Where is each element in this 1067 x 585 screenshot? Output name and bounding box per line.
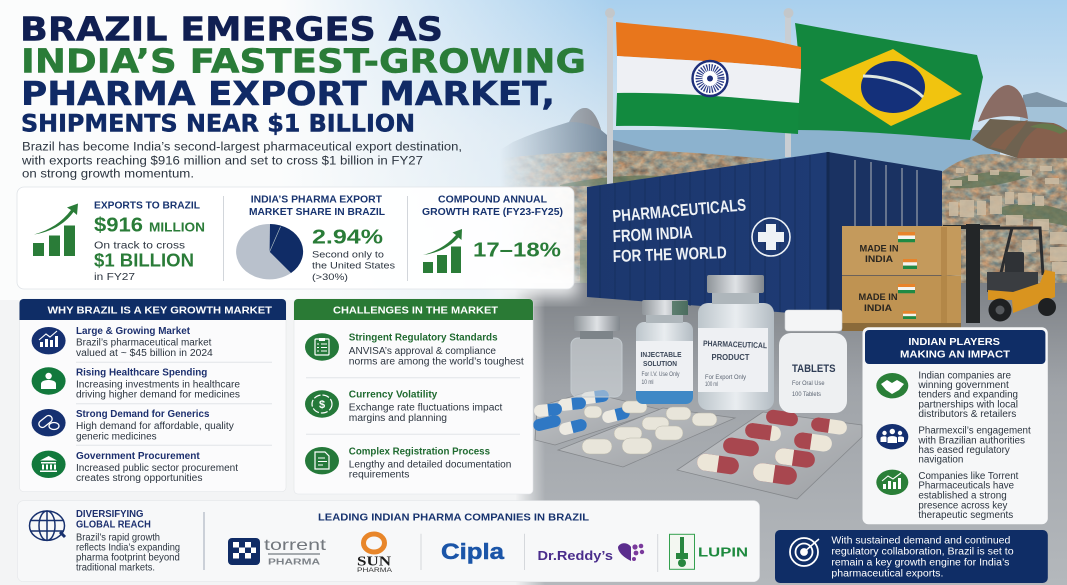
white tablets — [582, 401, 717, 454]
item: strong demand for generics: Strong Demand for Generics — [76, 408, 210, 420]
item: partnerships — [876, 370, 1018, 420]
Brazil flag — [784, 8, 983, 157]
item: large and growing market — [32, 325, 213, 359]
title — [20, 10, 586, 138]
cartons made in India: INDIA — [865, 254, 894, 264]
item: partnerships: Indian companies are — [918, 370, 1011, 381]
callout: outlook: regulatory collaboration, Brazil is set to — [831, 546, 1014, 557]
item: Pharmexcil engagement: Pharmexcil’s engagement — [918, 425, 1031, 436]
intro text: with exports reaching $916 million and set to cross $1 billion in FY27 — [21, 155, 423, 167]
intro text: on strong growth momentum. — [22, 169, 194, 181]
item: partnerships: distributors & retailers — [918, 409, 1016, 420]
item: Torrent presence: presence across key — [918, 500, 1007, 511]
item: rising healthcare spending: Increasing investments in healthcare — [76, 379, 240, 390]
item: rising healthcare spending: Rising Healthcare Spending — [76, 366, 207, 378]
item: currency volatility: Currency Volatility — [349, 389, 437, 401]
blue capsules — [532, 389, 631, 436]
item: currency volatility: margins and planning — [349, 413, 447, 424]
injectable solution vial: SOLUTION — [643, 359, 677, 368]
pharmaceutical product vial — [698, 275, 774, 410]
header: CHALLENGES IN THE MARKET — [333, 304, 499, 316]
pharmaceutical product vial: For Export Only — [705, 375, 746, 381]
item: government procurement — [32, 450, 238, 484]
icon: target — [790, 538, 819, 566]
pharmaceutical product vial: 100 ml — [705, 382, 718, 388]
icon: dollar cycle — [305, 390, 339, 418]
stat: market share: Second only to — [312, 249, 384, 260]
item: strong demand for generics: High demand for affordable, quality — [76, 421, 234, 432]
icon: chart — [876, 470, 908, 495]
small clear vial — [571, 316, 622, 397]
diversifying global reach — [30, 508, 180, 573]
item: strong demand for generics — [32, 408, 234, 442]
stat: exports to Brazil: $1 BILLION — [94, 251, 194, 271]
callout: outlook: remain a key growth engine for India’s — [831, 557, 1009, 568]
cartons made in India — [842, 226, 961, 331]
header: WHY BRAZIL IS A KEY GROWTH MARKET — [48, 304, 273, 316]
tablets bottle: For Oral Use — [792, 381, 825, 387]
logo: Lupin: LUPIN — [698, 545, 748, 560]
diversifying global reach: reflects India’s expanding — [76, 542, 180, 553]
flags of India and Brazil — [605, 8, 983, 187]
logo: Torrent Pharma — [228, 537, 327, 566]
logo: Sun Pharma — [357, 534, 392, 574]
stat: market share: 2.94% — [312, 226, 383, 248]
item: Torrent presence: established a strong — [918, 490, 1007, 501]
title: INDIA’S FASTEST-GROWING — [21, 42, 586, 81]
stat: compound annual growth rate: 17–18% — [473, 240, 561, 262]
item: complex registration process — [305, 445, 511, 481]
item: rising healthcare spending: driving higher demand for medicines — [76, 390, 240, 401]
stat: exports to Brazil: EXPORTS TO BRAZIL — [94, 200, 201, 212]
panel: why Brazil is a key growth market — [20, 299, 286, 492]
stat: market share: the United States — [312, 260, 395, 271]
item: government procurement: Government Procurement — [76, 450, 200, 462]
red capsules — [696, 409, 848, 486]
logo: Torrent Pharma: PHARMA — [268, 557, 320, 566]
panel: challenges in the market — [294, 299, 533, 494]
intro text: Brazil has become India’s second-largest pharmaceutical export destination, — [22, 142, 462, 154]
tablets bottle: 100 Tablets — [792, 392, 821, 398]
container lettering — [612, 195, 747, 266]
logo: Torrent Pharma: torrent — [264, 537, 327, 554]
stat: exports to Brazil: $916 — [94, 215, 143, 237]
item: government procurement: Increased public sector procurement — [76, 463, 238, 474]
item: complex registration process: Complex Registration Process — [349, 445, 490, 457]
icon: pills — [32, 409, 66, 436]
diversifying global reach: Brazil’s rapid growth — [76, 532, 160, 543]
item: partnerships: tenders and expanding — [918, 390, 1018, 401]
injectable solution vial — [636, 300, 693, 404]
pie chart — [236, 224, 303, 279]
item: Pharmexcil engagement: has eased regulatory — [918, 445, 1010, 456]
diversifying global reach: traditional markets. — [76, 562, 155, 573]
cartons made in India: MADE IN — [858, 292, 898, 302]
icon: rising bars — [33, 204, 78, 256]
stat: compound annual growth rate — [422, 194, 563, 273]
stat: market share: MARKET SHARE IN BRAZIL — [249, 206, 386, 218]
intro text — [21, 142, 462, 181]
icon: document — [305, 447, 339, 474]
stat: market share — [236, 194, 395, 283]
item: stringent regulatory standards: norms are among the world’s toughest — [349, 357, 524, 368]
icon: government building — [32, 451, 66, 478]
header — [294, 299, 533, 320]
pharmaceutical product vial: PHARMACEUTICAL — [703, 339, 767, 350]
item: partnerships: winning government — [917, 380, 1009, 391]
title: PHARMA EXPORT MARKET, — [21, 74, 555, 113]
blister packs and capsules — [532, 389, 862, 499]
header — [865, 330, 1045, 364]
diversifying global reach: pharma footprint beyond — [76, 552, 180, 563]
injectable solution vial: For I.V. Use Only — [642, 372, 680, 378]
callout: outlook: pharmaceutical exports. — [831, 568, 943, 579]
stat: compound annual growth rate: COMPOUND ANNUAL — [438, 194, 548, 206]
cartons made in India: MADE IN — [860, 244, 898, 254]
title: SHIPMENTS NEAR $1 BILLION — [21, 110, 415, 138]
icon: market chart — [32, 327, 66, 354]
panel: key statistics — [17, 187, 574, 289]
container lettering: PHARMACEUTICALS — [612, 195, 747, 226]
item: stringent regulatory standards — [305, 332, 524, 368]
item: complex registration process: Lengthy and detailed documentation — [349, 459, 511, 470]
icon: dollar cycle: $ — [319, 399, 325, 411]
item: Torrent presence — [876, 470, 1019, 521]
icon: handshake — [876, 373, 908, 398]
cartons made in India: INDIA — [864, 303, 893, 313]
title: BRAZIL EMERGES AS — [20, 10, 443, 49]
city greenery — [560, 172, 1067, 283]
diversifying global reach: DIVERSIFYING — [76, 508, 144, 520]
shipping container — [587, 152, 942, 316]
logo: Lupin — [670, 534, 748, 569]
stat: exports to Brazil: On track to cross — [94, 241, 185, 252]
container lettering: FROM INDIA — [612, 223, 693, 246]
callout: outlook: With sustained demand and continued — [831, 535, 1010, 546]
item: rising healthcare spending — [32, 366, 240, 401]
panel: Indian players making an impact — [862, 327, 1048, 524]
vials and tablet bottle — [571, 275, 847, 413]
logo: Cipla: Cipla — [441, 539, 505, 564]
stat: market share: INDIA’S PHARMA EXPORT — [251, 194, 383, 206]
callout: outlook — [775, 530, 1048, 583]
logo: Sun Pharma: SUN — [357, 555, 391, 570]
item: large and growing market: Large & Growing Market — [76, 325, 190, 337]
panel: leading companies and global reach — [18, 501, 760, 582]
icon: growth bars — [423, 229, 462, 273]
item: stringent regulatory standards: Stringent Regulatory Standards — [349, 332, 498, 344]
item: Pharmexcil engagement — [876, 424, 1031, 466]
city buildings — [949, 166, 1067, 274]
item: Torrent presence: Companies like Torrent — [918, 471, 1019, 482]
tablets bottle: TABLETS — [792, 363, 836, 375]
pharmaceutical product vial: PRODUCT — [712, 353, 750, 362]
container lettering: FOR THE WORLD — [612, 243, 727, 266]
leading companies heading: LEADING INDIAN PHARMA COMPANIES IN BRAZIL — [318, 511, 590, 523]
India flag — [605, 8, 801, 187]
item: large and growing market: Brazil’s pharmaceutical market — [76, 338, 212, 349]
item: Torrent presence: therapeutic segments — [918, 510, 1013, 521]
concrete floor — [518, 283, 1067, 585]
left mountain and city — [490, 108, 1067, 300]
tablets bottle — [779, 310, 847, 413]
header — [20, 299, 286, 320]
item: Pharmexcil engagement: with Brazilian authorities — [917, 435, 1025, 446]
item: currency volatility: Exchange rate fluctuations impact — [349, 403, 503, 414]
stat: exports to Brazil: in FY27 — [94, 272, 136, 283]
logo: Dr. Reddy's — [538, 543, 644, 563]
stat: exports to Brazil — [33, 200, 205, 283]
scene background: sky, sea, mountains and city — [341, 0, 1067, 585]
injectable solution vial: 10 ml — [642, 380, 654, 386]
icon: people with care — [32, 367, 66, 395]
icon: group of people — [876, 424, 908, 449]
logo: Dr. Reddy's: Dr.Reddy’s — [538, 548, 613, 563]
item: strong demand for generics: generic medicines — [76, 431, 157, 442]
diversifying global reach: GLOBAL REACH — [76, 519, 151, 531]
item: complex registration process: requirements — [349, 470, 409, 481]
stat: market share: (>30%) — [312, 272, 348, 283]
stat: compound annual growth rate: GROWTH RATE (FY23-FY25) — [422, 206, 563, 218]
injectable solution vial: INJECTABLE — [640, 350, 682, 359]
logo: Sun Pharma: PHARMA — [357, 568, 392, 574]
item: stringent regulatory standards: ANVISA’s approval & compliance — [349, 346, 496, 357]
right mountains — [972, 85, 1067, 158]
item: partnerships: partnerships with local — [918, 399, 1018, 410]
icon: clipboard — [305, 333, 339, 361]
item: Pharmexcil engagement: navigation — [918, 455, 963, 466]
item: government procurement: creates strong opportunities — [76, 473, 202, 484]
header: MAKING AN IMPACT — [900, 348, 1011, 360]
header: INDIAN PLAYERS — [908, 336, 1000, 348]
item: currency volatility — [305, 389, 503, 424]
stat: exports to Brazil: MILLION — [149, 220, 205, 235]
icon: globe — [30, 511, 65, 540]
item: large and growing market: valued at ~ $45 billion in 2024 — [76, 348, 213, 359]
item: Torrent presence: Pharmaceuticals have — [918, 481, 1014, 492]
forklift — [943, 224, 1056, 323]
medical cross emblem — [752, 218, 790, 256]
